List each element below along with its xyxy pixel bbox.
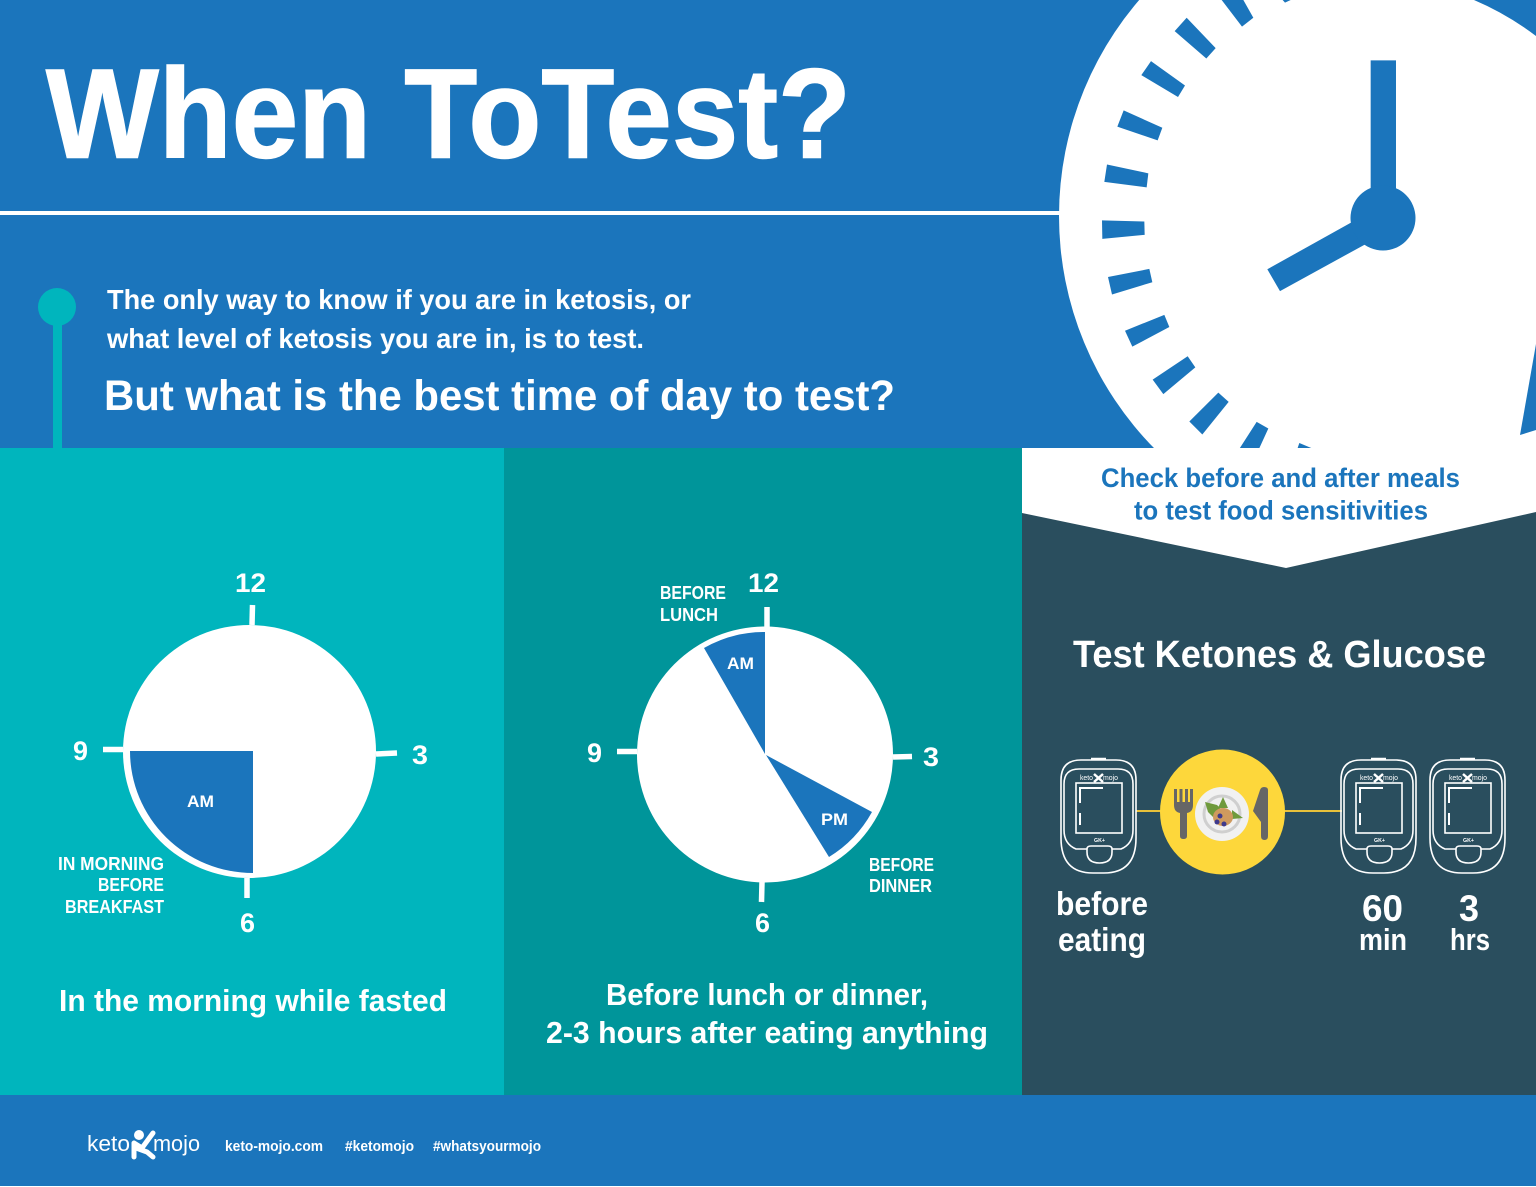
label: before eating: eating [1058,921,1146,958]
footer links: #ketomojo [345,1139,414,1155]
chart: midday clock: 12 [748,568,779,598]
panel: morning test [0,448,504,1095]
panel: header background [0,0,1536,448]
footer links [225,1139,541,1155]
intro text [106,284,691,354]
chart: morning clock: IN MORNING [58,854,164,874]
chart: morning clock [58,568,428,938]
footer links: keto-mojo.com [225,1139,323,1155]
chart: midday clock: 6 [755,908,770,938]
chart: morning clock: BREAKFAST [65,897,164,917]
chart: morning clock: 3 [412,740,428,770]
panel: ketones and glucose [1022,448,1536,1095]
icon: large clock [1059,0,1536,547]
label: 60 min: 60 [1362,888,1403,929]
footer links: #whatsyourmojo [433,1139,541,1155]
divider line [0,211,1062,215]
caption: morning: In the morning while fasted [59,983,447,1018]
icon: meter at 60 minutes: mojo [1383,773,1398,782]
chart: midday clock: BEFORE [660,583,726,603]
chart: midday clock: 9 [587,738,602,768]
caption: before lunch or dinner: Before lunch or dinner, [606,977,928,1012]
label: 60 min: min [1359,922,1407,957]
callout: food sensitivities: to test food sensitivities [1134,496,1428,526]
chart: midday clock: DINNER [869,876,932,896]
logo: keto-mojo [87,1130,200,1157]
icon: meter at 3 hours: mojo [1472,773,1487,782]
logo: keto-mojo: keto [87,1131,130,1156]
label: 3 hrs [1450,888,1490,957]
heading: test ketones and glucose: Test Ketones & Glucose [1073,634,1486,676]
icon: meter at 60 minutes: keto [1360,773,1373,782]
icon: meter at 3 hours: GK+ [1463,838,1474,844]
logo: keto-mojo: mojo [153,1131,200,1156]
label: before eating: before [1056,885,1148,922]
icon: meter before eating [1061,759,1136,873]
icon: meter before eating: mojo [1103,773,1118,782]
icon: meter at 3 hours [1430,759,1505,873]
panel: before meals test [504,448,1023,1095]
footer band [0,1095,1536,1186]
chart: midday clock: AM [727,654,754,673]
label: 3 hrs: hrs [1450,922,1490,957]
chart: morning clock: 6 [240,908,255,938]
icon: meter at 60 minutes: GK+ [1374,838,1385,844]
icon: teal pin marker [38,288,76,448]
label: 60 min [1359,888,1407,957]
intro text: what level of ketosis you are in, is to test. [106,323,644,354]
chart: morning clock: BEFORE [98,875,164,895]
intro text: The only way to know if you are in ketosis, or [107,284,691,315]
title: When ToTest? [46,42,851,184]
icon: plate with fork and knife [1160,750,1285,874]
label: before eating [1056,885,1148,958]
chart: midday clock: LUNCH [660,605,718,625]
callout: food sensitivities [1022,448,1536,568]
chart: midday clock: PM [821,810,848,829]
icon: meter before eating: keto [1080,773,1093,782]
chart: midday clock: BEFORE [869,855,934,875]
question heading: But what is the best time of day to test? [104,372,895,420]
chart: morning clock: 12 [235,568,266,598]
caption: before lunch or dinner: 2-3 hours after eating anything [546,1015,988,1050]
icon: meter before eating: GK+ [1094,838,1105,844]
chart: morning clock: 9 [73,736,88,766]
chart: midday clock [587,568,939,938]
icon: meter at 60 minutes [1341,759,1416,873]
connector lines [1136,810,1342,812]
callout: food sensitivities: Check before and after meals [1101,463,1460,493]
chart: morning clock: AM [187,792,214,811]
chart: midday clock: 3 [923,742,939,772]
icon: meter at 3 hours: keto [1449,773,1462,782]
label: 3 hrs: 3 [1459,888,1479,929]
caption: before lunch or dinner [546,977,988,1050]
